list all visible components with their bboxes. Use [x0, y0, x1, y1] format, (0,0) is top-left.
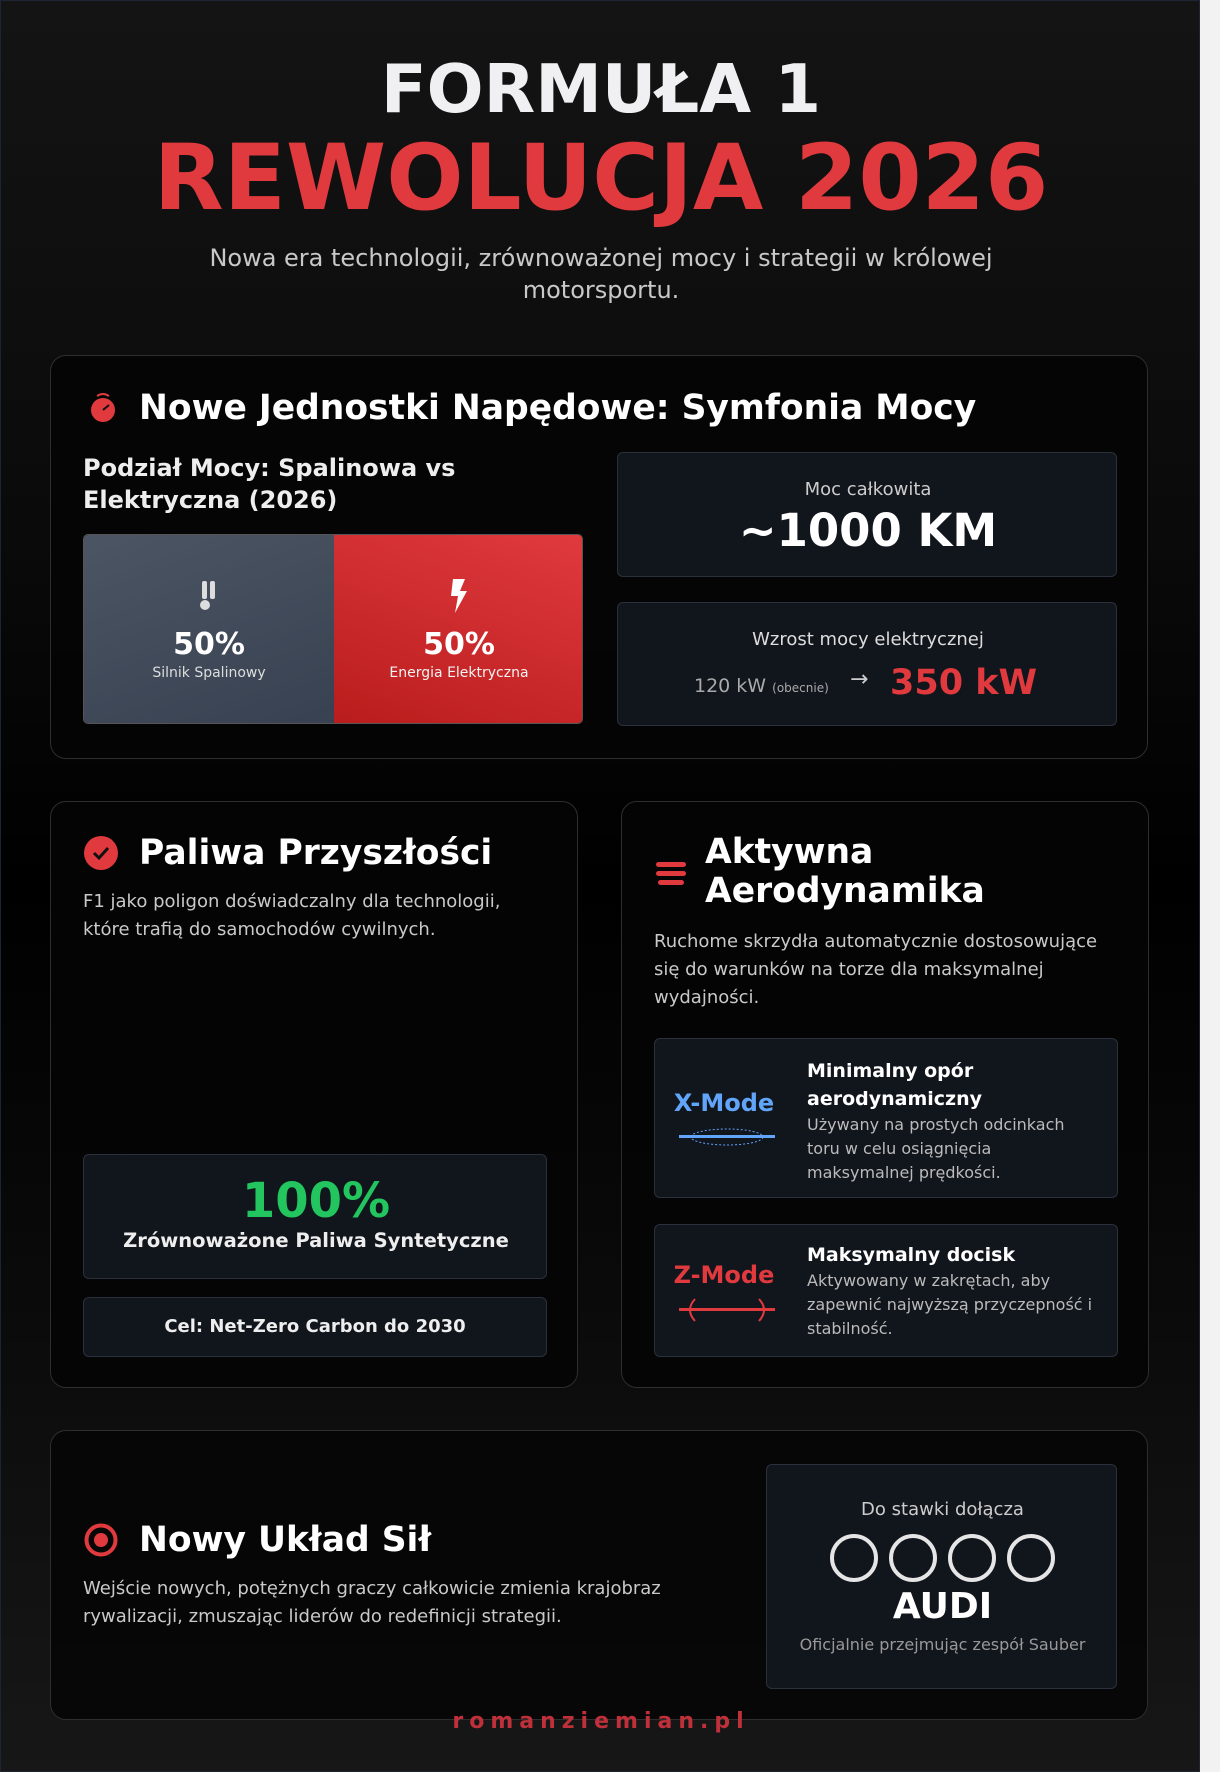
- card: Audi: Oficjalnie przejmując zespół Sauber: [800, 1635, 1085, 1654]
- panel: fuels: [50, 801, 578, 1388]
- stat: total power: [617, 452, 1117, 577]
- stat: 100%: [83, 1154, 547, 1279]
- text: Ruchome skrzydła automatycznie dostosowujące się do warunków na torze dla maksymalnej wydajności.: [654, 931, 1097, 1008]
- stat: electric growth: Wzrost mocy elektrycznej: [752, 629, 984, 650]
- card: Audi: [766, 1464, 1117, 1689]
- heading: Paliwa Przyszłości: [139, 833, 492, 873]
- stat: electric growth: →: [850, 667, 868, 692]
- heading: Aerodynamika: [705, 871, 985, 911]
- subheading: Podział Mocy: Spalinowa vs Elektryczna (2026): [83, 454, 455, 514]
- segment: electric: Energia Elektryczna: [389, 665, 529, 681]
- heading: Nowy Układ Sił: [139, 1520, 431, 1560]
- text: Wejście nowych, potężnych graczy całkowicie zmienia krajobraz rywalizacji, zmuszając liderów do redefinicji strategii.: [83, 1578, 661, 1627]
- icon: target: [84, 1524, 118, 1556]
- icon: audi rings: [830, 1534, 1055, 1582]
- icon: downforce: [679, 1298, 775, 1322]
- card: X-Mode: X-Mode: [674, 1089, 774, 1117]
- card: Z-Mode: Aktywowany w zakrętach, aby zapewnić najwyższą przyczepność i stabilność.: [807, 1271, 1092, 1338]
- segment: combustion: Silnik Spalinowy: [152, 665, 266, 681]
- heading: Nowe Jednostki Napędowe: Symfonia Mocy: [139, 388, 976, 428]
- panel: aero: [621, 801, 1149, 1388]
- heading: [705, 832, 985, 911]
- main title: REWOLUCJA 2026: [154, 126, 1048, 231]
- stat: total power: Moc całkowita: [805, 479, 931, 500]
- title: FORMUŁA 1: [381, 50, 821, 128]
- stat: total power: ~1000 KM: [739, 504, 997, 557]
- goal box: [83, 1297, 547, 1357]
- footer: site: romanziemian.pl: [452, 1709, 750, 1734]
- segment: combustion: 50%: [173, 627, 245, 662]
- card: X-Mode: Używany na prostych odcinkach toru w celu osiągnięcia maksymalnej prędkości.: [807, 1115, 1065, 1182]
- segment: electric: [334, 535, 584, 725]
- card: Z-Mode: [654, 1224, 1118, 1357]
- panel: new balance of power: [50, 1430, 1148, 1720]
- chart: power split: [83, 534, 583, 724]
- icon: piston: [200, 581, 215, 610]
- icon: bolt: [451, 579, 467, 613]
- stat: electric growth: 120 kW (obecnie): [694, 675, 829, 697]
- icon: gauge: [91, 393, 115, 422]
- heading: Aktywna: [705, 832, 873, 872]
- stat: electric growth: [617, 602, 1117, 726]
- segment: combustion: [84, 535, 334, 725]
- stat: electric growth: 350 kW: [890, 663, 1037, 703]
- icon: lines: [656, 862, 686, 885]
- goal box: Cel: Net-Zero Carbon do 2030: [164, 1316, 466, 1337]
- card: X-Mode: Minimalny opór aerodynamiczny: [807, 1060, 982, 1110]
- icon: low drag: [679, 1128, 775, 1146]
- icon: check: [84, 836, 118, 870]
- text: F1 jako poligon doświadczalny dla technologii, które trafią do samochodów cywilnych.: [83, 891, 500, 940]
- card: Z-Mode: Z-Mode: [674, 1261, 774, 1289]
- stat: 100%: 100%: [242, 1173, 390, 1229]
- card: Z-Mode: Maksymalny docisk: [807, 1244, 1015, 1266]
- card: Audi: Do stawki dołącza: [861, 1499, 1024, 1520]
- stat: 100%: Zrównoważone Paliwa Syntetyczne: [123, 1229, 509, 1252]
- segment: electric: 50%: [423, 627, 495, 662]
- card: Audi: AUDI: [893, 1586, 992, 1627]
- subtitle: Nowa era technologii, zrównoważonej mocy i strategii w królowej motorsportu.: [209, 244, 993, 304]
- panel: power units: [50, 355, 1148, 759]
- card: X-Mode: [654, 1038, 1118, 1198]
